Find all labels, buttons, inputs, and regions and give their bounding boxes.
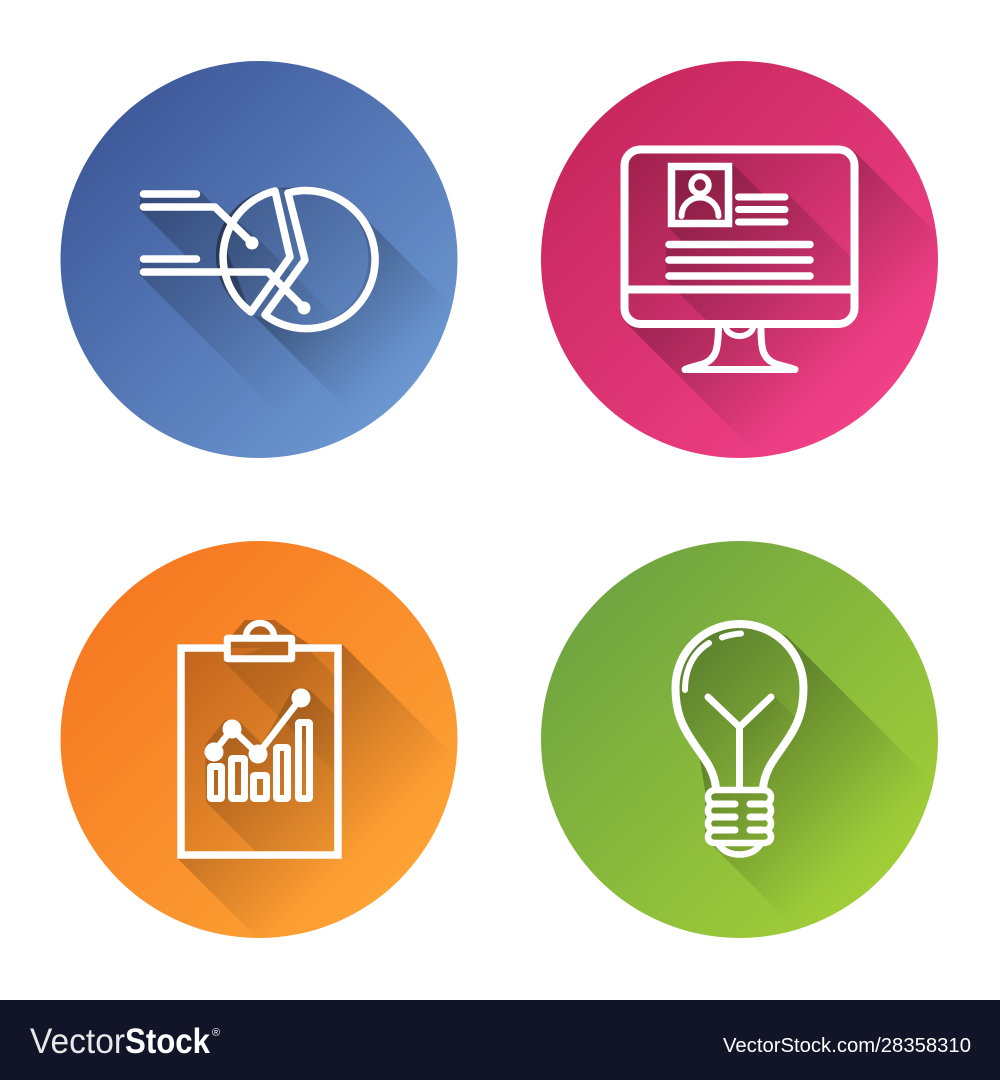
green circle background xyxy=(541,541,938,938)
panel: pink circle with monitor xyxy=(541,61,945,460)
screen divider xyxy=(625,286,854,294)
short text lines xyxy=(738,197,785,222)
trend dots xyxy=(204,688,310,764)
long shadow of clipboard icon xyxy=(177,620,460,941)
bulb tip xyxy=(719,845,760,854)
pie slice: right xyxy=(265,191,375,329)
panel: orange circle with clipboard xyxy=(60,541,460,941)
trend line xyxy=(214,698,301,754)
footer image id: VectorStock.com/28358310 xyxy=(723,1035,971,1057)
panel: blue circle with pie chart xyxy=(60,61,460,460)
connector lines xyxy=(144,194,304,308)
clip ring xyxy=(246,623,274,637)
screw threads xyxy=(714,804,763,830)
icon: pie chart with connector lines xyxy=(144,191,375,329)
bar chart xyxy=(210,722,310,798)
filament xyxy=(708,697,771,787)
stand notch xyxy=(726,328,753,336)
monitor stand xyxy=(685,328,795,370)
icon: light bulb xyxy=(676,624,804,854)
icon: clipboard with chart xyxy=(181,623,338,855)
icon: monitor with resume xyxy=(624,150,854,370)
long shadow of monitor icon xyxy=(621,151,937,437)
pie slice: left xyxy=(223,191,290,312)
long shadow of pie chart icon xyxy=(140,187,439,396)
glass highlights xyxy=(685,634,741,690)
footer logo xyxy=(30,1022,220,1061)
clipboard board xyxy=(181,648,338,855)
id photo frame xyxy=(672,166,728,224)
long shadow of bulb icon xyxy=(680,628,912,902)
screw base contour xyxy=(708,790,771,843)
footer logo: Vector xyxy=(30,1022,125,1061)
long text lines xyxy=(669,244,810,276)
footer logo: Stock xyxy=(125,1022,210,1061)
panel: green circle with light bulb xyxy=(541,541,945,945)
blue circle background xyxy=(60,61,458,458)
bulb glass xyxy=(676,624,804,788)
monitor frame xyxy=(624,150,854,324)
connector dots xyxy=(246,236,310,314)
clipboard clip xyxy=(227,638,292,659)
orange circle background xyxy=(60,541,458,938)
footer bar xyxy=(0,1000,1000,1080)
pink circle background xyxy=(541,61,938,458)
person icon xyxy=(682,176,718,216)
footer logo: ® xyxy=(212,1027,220,1039)
